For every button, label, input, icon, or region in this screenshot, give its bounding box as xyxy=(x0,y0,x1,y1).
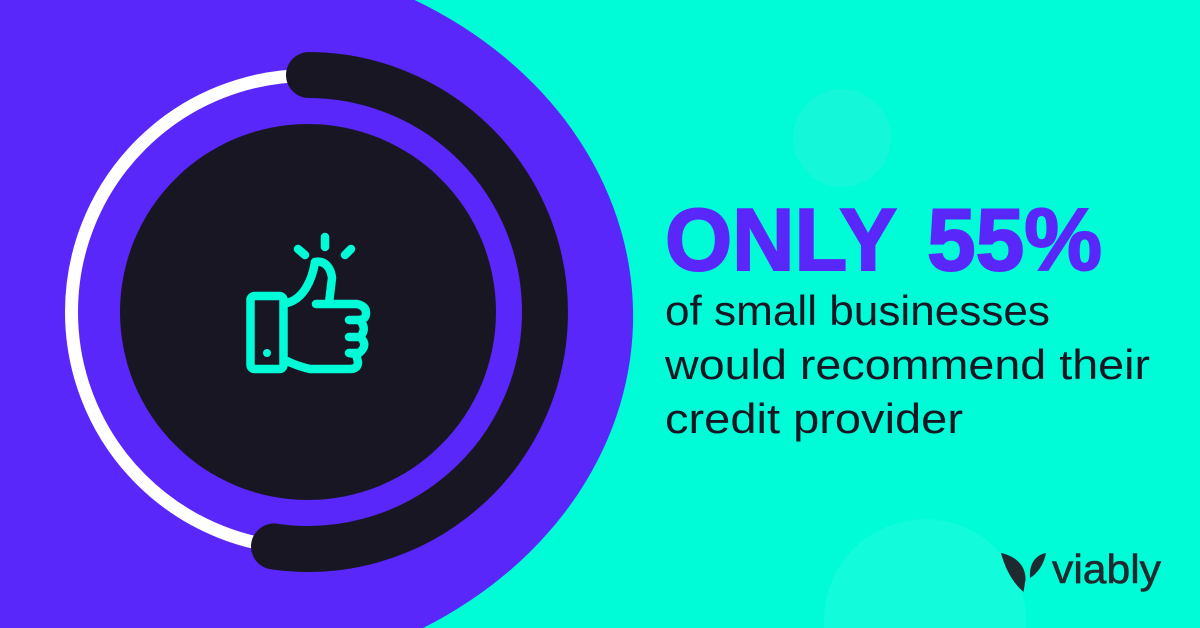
heading: ONLY xyxy=(665,190,897,289)
decorative circle: bottom xyxy=(824,519,1026,628)
logo: viably xyxy=(1001,546,1162,592)
icon: thumbs up xyxy=(250,237,366,369)
inner dark circle xyxy=(120,124,496,500)
text block: description: credit provider xyxy=(665,395,963,442)
logo mark xyxy=(1001,553,1046,592)
ring: dark progress arc xyxy=(274,75,545,549)
decorative circle: top xyxy=(793,89,891,187)
text block: description: would recommend their xyxy=(664,341,1150,388)
text block: description: of small businesses xyxy=(665,287,1050,334)
heading: 55% xyxy=(927,190,1102,289)
logo wordmark: viably xyxy=(1052,546,1162,592)
heading xyxy=(665,190,1102,289)
donut chart: 55% xyxy=(72,75,545,549)
purple background panel xyxy=(0,0,633,628)
text block: description xyxy=(664,287,1150,442)
ring: white track xyxy=(72,76,544,548)
